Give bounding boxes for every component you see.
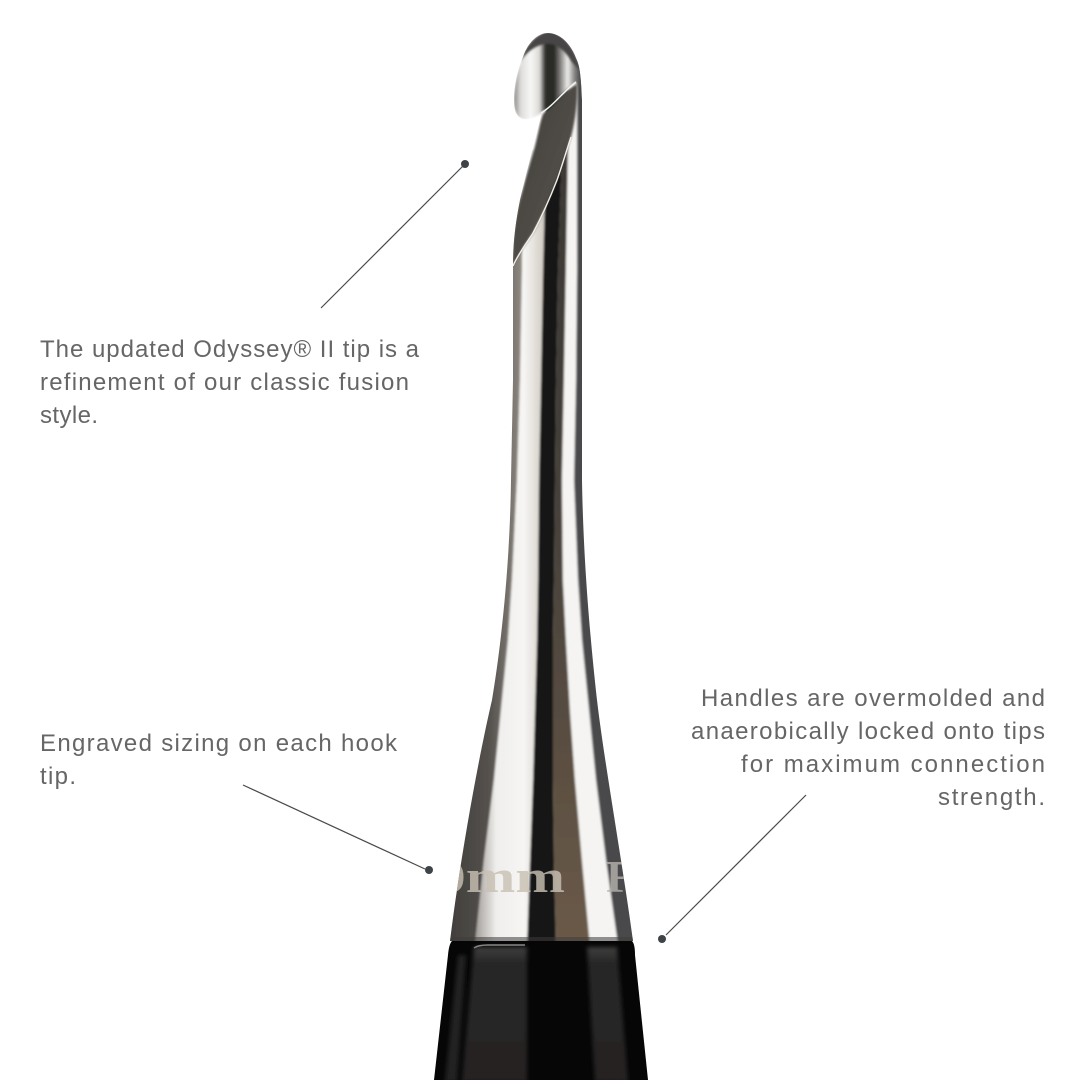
handle far-left sheen: [445, 955, 466, 1080]
engraved size text: [457, 862, 624, 892]
crochet hook: [430, 20, 655, 1080]
text: engraved sizing: tip.: [40, 763, 76, 790]
leader line: handle: [666, 795, 806, 935]
brown reflection band: [553, 60, 590, 945]
left bright band: [475, 150, 546, 945]
bottom collar shade: [450, 937, 633, 941]
right bright band: [562, 60, 618, 945]
throat highlight: [513, 137, 571, 266]
text: tip refinement: The updated Odyssey® II tip is a: [40, 336, 420, 363]
black handle: [430, 938, 655, 1080]
callout: handle connection: [658, 685, 1045, 943]
engraved size text: F: [606, 851, 634, 902]
hook throat cut: [513, 84, 577, 266]
leader dot: tip: [461, 160, 469, 168]
leader line: tip: [321, 166, 463, 308]
handle rim highlight: [474, 945, 525, 948]
leader line: sizing: [243, 785, 425, 869]
right dark edge: [572, 60, 633, 941]
engraved size text: 0mm: [436, 851, 565, 902]
central black band: [527, 60, 566, 945]
callout: engraved sizing: [40, 730, 433, 874]
left dark edge: [450, 188, 524, 941]
leader dot: handle: [658, 935, 666, 943]
text: handle connection: strength.: [938, 784, 1045, 811]
text: handle connection: Handles are overmolded and: [701, 685, 1045, 712]
leader dot: sizing: [425, 866, 433, 874]
text: engraved sizing: Engraved sizing on each hook: [40, 730, 398, 757]
head top dark cap: [520, 33, 581, 72]
handle left sheen: [462, 947, 527, 1080]
text: handle connection: anaerobically locked onto tips: [691, 718, 1045, 745]
handle right sheen: [587, 947, 628, 1080]
text: tip refinement: refinement of our classic fusion: [40, 369, 409, 396]
hook head: [514, 33, 582, 119]
callout: tip refinement: [40, 160, 469, 429]
text: tip refinement: style.: [40, 402, 98, 429]
metal tip and shaft: [450, 33, 633, 941]
head rim line: [541, 82, 576, 113]
text: handle connection: for maximum connection: [741, 751, 1045, 778]
